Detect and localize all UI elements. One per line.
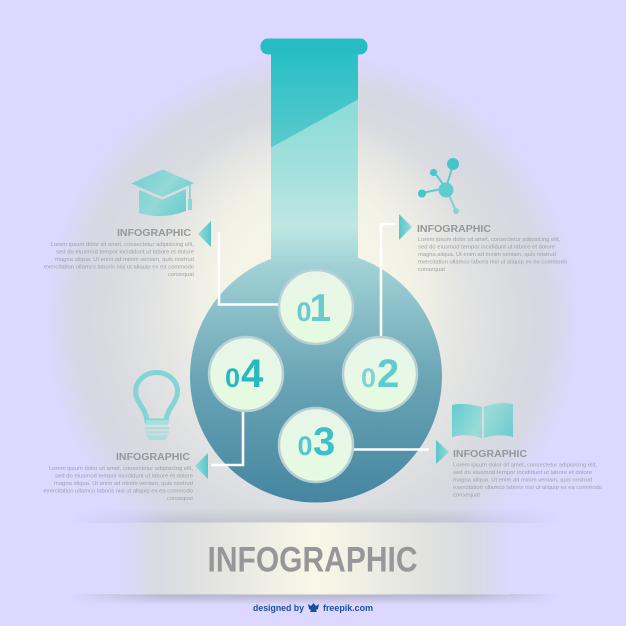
body: consequat	[418, 267, 445, 273]
icon: molecule	[418, 158, 459, 214]
flask bulb	[190, 250, 442, 502]
body: sed do eiusmod tempor incididunt ut labore et dolore	[418, 244, 555, 250]
step 04: 0	[225, 363, 240, 393]
body: magna aliqua. Ut enim ad minim veniam, quis nostrud	[453, 478, 592, 484]
icon: light bulb	[136, 372, 178, 440]
arrow: bottom right	[436, 440, 449, 464]
footer credit	[253, 603, 373, 613]
arrow: top right	[399, 214, 412, 240]
body: magna aliqua. Ut enim ad minim veniam, quis nostrud	[55, 257, 194, 263]
body: magna aliqua. Ut enim ad minim veniam, quis nostrud	[418, 252, 556, 258]
body: consequat	[453, 492, 480, 498]
body: Lorem ipsum dolor sit amet, consectetur adipisicing elit,	[49, 466, 193, 472]
body: exercitation ullamco laboris nisi ut aliquip ex ea commodo	[418, 260, 567, 266]
step 01: 0	[296, 297, 312, 327]
icon: graduation cap	[131, 170, 194, 216]
heading: INFOGRAPHIC	[117, 227, 191, 239]
icon: open book	[452, 403, 513, 438]
body: consequat	[168, 272, 194, 278]
step 04: 4	[241, 352, 264, 396]
footer credit: freepik.com	[323, 603, 373, 613]
text block: top right	[417, 223, 567, 273]
arrow: top left	[198, 221, 211, 247]
step 01: 1	[310, 287, 331, 330]
flask neck	[271, 50, 358, 262]
step 04	[209, 337, 283, 411]
body	[44, 466, 193, 502]
flask	[190, 38, 442, 502]
body: exercitation ullamco laboris nisi ut aliquip ex ea commodo	[453, 485, 602, 491]
step 03: 3	[313, 420, 335, 464]
flask lip	[260, 38, 368, 54]
arrow: bottom left	[195, 453, 208, 479]
body	[418, 237, 567, 273]
text block: bottom left	[44, 451, 193, 502]
connector lines	[211, 224, 429, 465]
step 02: 2	[377, 352, 399, 396]
step 02	[343, 337, 417, 411]
step 03	[279, 408, 353, 482]
icon: freepik logo	[308, 603, 319, 612]
footer credit: designed by	[253, 603, 304, 613]
body	[44, 242, 194, 278]
heading: INFOGRAPHIC	[453, 448, 527, 460]
body: Lorem ipsum dolor sit amet, consectetur adipisicing elit,	[50, 242, 194, 248]
body: exercitation ullamco laboris nisi ut aliquip ex ea commodo	[44, 264, 194, 270]
heading: INFOGRAPHIC	[417, 223, 491, 235]
flask neck dark reflection	[271, 50, 358, 148]
step 03: 0	[298, 431, 313, 461]
step 01	[279, 270, 353, 344]
background glow circle	[44, 52, 580, 588]
body: sed do eiusmod tempor incididunt ut labore et dolore	[453, 470, 592, 476]
body: consequat	[167, 496, 193, 502]
body	[453, 462, 602, 498]
heading: INFOGRAPHIC	[116, 451, 190, 463]
body: sed do eiusmod tempor incididunt ut labore et dolore	[56, 250, 194, 256]
title banner	[86, 512, 546, 604]
body: magna aliqua. Ut enim ad minim veniam, quis nostrud	[54, 481, 193, 487]
body: sed do eiusmod tempor incididunt ut labore et dolore	[55, 474, 193, 480]
body: Lorem ipsum dolor sit amet, consectetur adipisicing elit,	[418, 237, 560, 243]
body: exercitation ullamco laboris nisi ut aliquip ex ea commodo	[44, 488, 193, 494]
text block: bottom right	[453, 448, 602, 498]
title: INFOGRAPHIC	[208, 540, 418, 580]
text block: top left	[44, 227, 194, 278]
step 02: 0	[361, 363, 376, 393]
body: Lorem ipsum dolor sit amet, consectetur adipisicing elit,	[453, 462, 597, 468]
